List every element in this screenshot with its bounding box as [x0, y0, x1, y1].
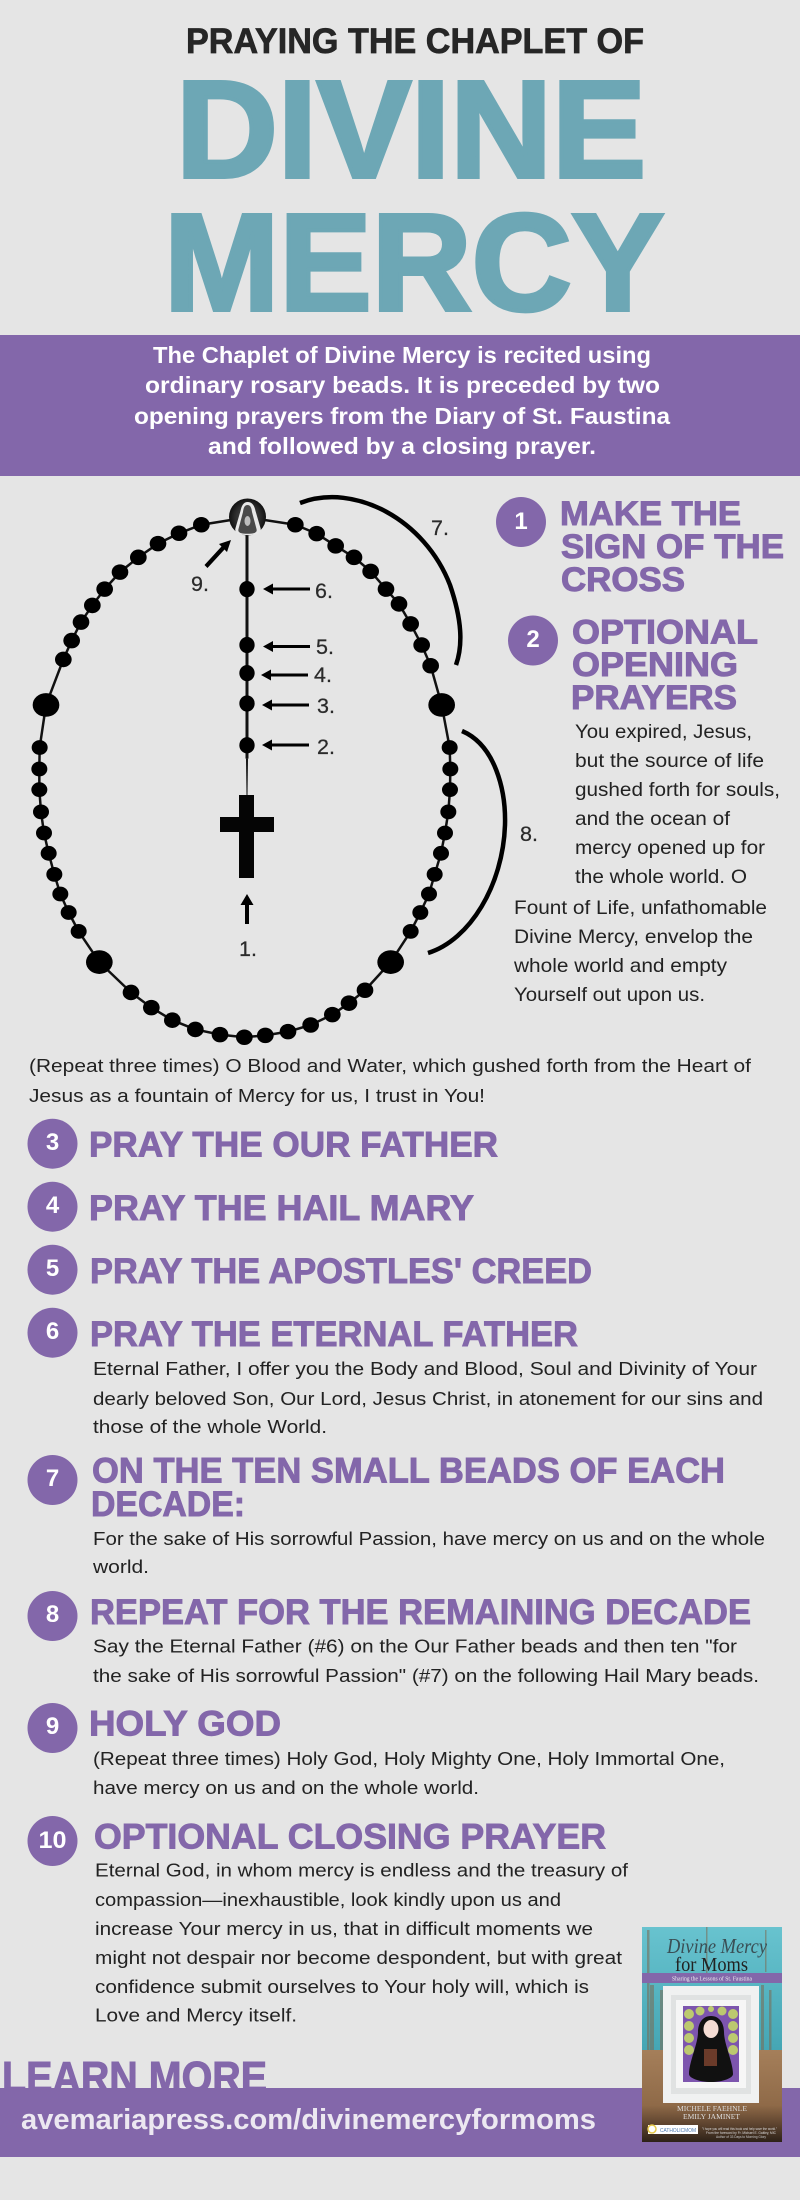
step 9: have mercy on us and on the whole world. — [93, 1777, 479, 1798]
bracket 7 with label — [300, 497, 460, 665]
footer band with url — [0, 2088, 800, 2157]
step 5 — [28, 1245, 592, 1295]
step 6: Eternal Father, I offer you the Body and Blood, Soul and Divinity of Your — [93, 1358, 757, 1379]
step 10: Love and Mercy itself. — [95, 2005, 297, 2026]
title: divine: DIVINE — [176, 53, 646, 207]
text: opening prayer: Yourself out upon us. — [514, 985, 705, 1006]
book cover: Divine Mercy — [666, 1934, 768, 1958]
text: opening prayer: and the ocean of — [575, 809, 731, 830]
step 1: CROSS — [561, 561, 685, 599]
book cover: EMILY JAMINET — [683, 2112, 740, 2121]
arrow 5 with label — [263, 635, 334, 659]
step 7 — [28, 1452, 765, 1577]
step 10: OPTIONAL CLOSING PRAYER — [94, 1818, 606, 1857]
bracket 8 with label — [428, 731, 538, 953]
text: opening prayer: the whole world. O — [575, 867, 747, 888]
step 2: OPENING — [572, 646, 738, 684]
book cover: Sharing the Lessons of St. Faustina — [672, 1976, 752, 1982]
arrow 4 with label — [261, 663, 332, 687]
text: opening prayer: mercy opened up for — [575, 838, 766, 859]
step 4: 4 — [46, 1192, 60, 1219]
step 10: might not despair nor become despondent, but with great — [95, 1947, 622, 1968]
step 6: 6 — [46, 1318, 59, 1345]
panel: intro banner: ordinary rosary beads. It is preceded by two — [145, 372, 660, 398]
bracket 7 with label: 7. — [431, 516, 449, 540]
step 3 — [28, 1119, 498, 1169]
arrow 3 with label — [262, 694, 335, 718]
text: opening prayer: You expired, Jesus, — [575, 722, 752, 743]
step 7: ON THE TEN SMALL BEADS OF EACH — [92, 1452, 725, 1491]
step 7: DECADE: — [91, 1485, 245, 1524]
step 10: 10 — [38, 1827, 66, 1854]
step 2: 2 — [526, 626, 540, 653]
arrow 1 with label: 1. — [239, 937, 257, 961]
text: opening prayer: Divine Mercy, envelop the — [514, 927, 753, 948]
step 2 — [508, 614, 780, 1006]
step 1: MAKE THE — [560, 495, 741, 533]
step 1: SIGN OF THE — [561, 528, 784, 566]
step 10: confidence submit ourselves to Your holy will, which is — [95, 1976, 589, 1997]
text: opening prayer — [513, 722, 780, 1006]
step 3: 3 — [46, 1129, 59, 1156]
icon: medal of Mary — [229, 498, 266, 536]
panel: intro banner — [0, 335, 800, 476]
arrow 9 with label: 9. — [191, 572, 209, 596]
arrow 6 with label: 6. — [315, 579, 333, 603]
panel: intro banner: and followed by a closing prayer. — [208, 433, 596, 459]
title: mercy: MERCY — [164, 186, 664, 340]
step 5: 5 — [46, 1255, 59, 1282]
arrow 4 with label: 4. — [314, 663, 332, 687]
step 1 — [496, 495, 784, 599]
book cover: "I hope you will read this book and help save the world." — [702, 2127, 778, 2131]
book cover: for Moms — [675, 1954, 748, 1976]
arrow 2 with label — [262, 735, 335, 759]
step 4 — [28, 1182, 474, 1232]
step 6: PRAY THE ETERNAL FATHER — [90, 1315, 578, 1354]
step 8: Say the Eternal Father (#6) on the Our Father beads and then ten "for — [93, 1636, 737, 1657]
icon: crucifix — [220, 795, 274, 878]
step 10: increase Your mercy in us, that in difficult moments we — [95, 1918, 593, 1939]
text: opening prayer: but the source of life — [575, 751, 764, 772]
rosary diagram — [31, 498, 458, 1045]
step 9: HOLY GOD — [89, 1705, 281, 1744]
step 10 — [28, 1816, 629, 2026]
arrow 1 with label — [239, 894, 257, 961]
arrow 9 with label — [191, 540, 231, 596]
text: opening prayer: whole world and empty — [513, 956, 727, 977]
heading: learn more: LEARN MORE — [2, 2053, 267, 2102]
step 9 — [28, 1703, 725, 1798]
footer band with url: avemariapress.com/divinemercyformoms — [21, 2104, 596, 2136]
arrow 6 with label — [263, 579, 333, 603]
panel: intro banner: The Chaplet of Divine Mercy is recited using — [153, 342, 651, 368]
arrow 2 with label: 2. — [317, 735, 335, 759]
step 8: REPEAT FOR THE REMAINING DECADE — [90, 1593, 751, 1632]
step 3: PRAY THE OUR FATHER — [89, 1126, 498, 1165]
arrow 5 with label: 5. — [316, 635, 334, 659]
step 6: dearly beloved Son, Our Lord, Jesus Christ, in atonement for our sins and — [93, 1388, 763, 1409]
step 10: Eternal God, in whom mercy is endless and the treasury of — [95, 1860, 629, 1881]
arrow 3 with label: 3. — [317, 694, 335, 718]
step 4: PRAY THE HAIL MARY — [89, 1189, 474, 1228]
bracket 8 with label: 8. — [520, 822, 538, 846]
step 8: 8 — [46, 1601, 59, 1628]
title: praying the chaplet of: PRAYING THE CHAPLET OF — [186, 22, 644, 61]
step 1: 1 — [514, 508, 528, 535]
step 9: 9 — [46, 1713, 59, 1740]
book cover: CATHOLICMOM — [660, 2128, 696, 2134]
step 6 — [28, 1308, 763, 1437]
step 7: For the sake of His sorrowful Passion, have mercy on us and on the whole — [93, 1528, 765, 1549]
step 9: (Repeat three times) Holy God, Holy Mighty One, Holy Immortal One, — [93, 1748, 725, 1769]
text: repeat three times: (Repeat three times) O Blood and Water, which gushed forth from the Heart of — [29, 1055, 752, 1076]
step 7: 7 — [46, 1465, 59, 1492]
step 7: world. — [92, 1556, 149, 1577]
text: repeat three times: Jesus as a fountain of Mercy for us, I trust in You! — [29, 1085, 485, 1106]
step 5: PRAY THE APOSTLES' CREED — [90, 1252, 592, 1291]
step 8 — [28, 1591, 759, 1686]
book cover: From the foreword by Fr. Michael E. Gaitley, MIC — [706, 2131, 776, 2135]
text: opening prayer: gushed forth for souls, — [575, 780, 780, 801]
book cover: Author of 33 Days to Morning Glory — [716, 2135, 766, 2139]
text: opening prayer: Fount of Life, unfathomable — [514, 898, 767, 919]
step 10: compassion—inexhaustible, look kindly upon us and — [95, 1889, 561, 1910]
panel: intro banner: opening prayers from the Diary of St. Faustina — [134, 403, 671, 429]
step 2: OPTIONAL — [572, 614, 758, 652]
book cover — [642, 1927, 782, 2142]
text: repeat three times — [29, 1055, 752, 1106]
step 2: PRAYERS — [571, 679, 737, 717]
book cover: MICHELE FAEHNLE — [677, 2104, 747, 2113]
step 8: the sake of His sorrowful Passion" (#7) on the following Hail Mary beads. — [93, 1665, 759, 1686]
step 6: those of the whole World. — [93, 1416, 327, 1437]
